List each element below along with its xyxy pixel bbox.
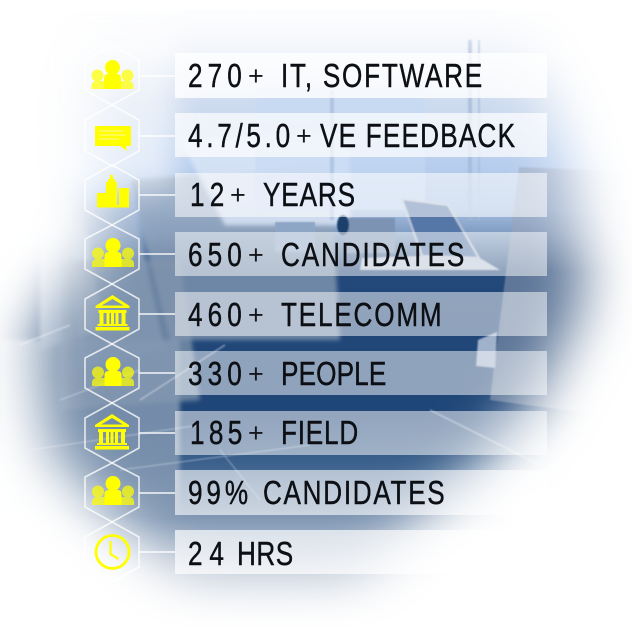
row 5: 460+ TELECOMM bbox=[175, 292, 547, 336]
row 7: 185+ FIELD: + bbox=[248, 418, 264, 448]
row 5: 460+ TELECOMM: 460 bbox=[188, 297, 242, 334]
row 3: 12+ YEARS: 12 bbox=[190, 177, 224, 214]
row 8: 99% CANDIDATES: CANDIDATES bbox=[263, 475, 445, 512]
row 5: 460+ TELECOMM: TELECOMM bbox=[281, 297, 442, 334]
row 8: 99% CANDIDATES bbox=[175, 470, 547, 515]
hexagon 6 bbox=[85, 344, 139, 403]
icon: buildings bbox=[97, 175, 129, 208]
row 2: 4.7/5.0 +VE FEEDBACK: VE FEEDBACK bbox=[320, 118, 515, 155]
pale haze behind the upper hexagons bbox=[40, 20, 175, 190]
row 1: 270+ IT, SOFTWARE: IT, SOFTWARE bbox=[281, 58, 482, 95]
row 2: 4.7/5.0 +VE FEEDBACK: + bbox=[296, 121, 312, 151]
row 9: 24 HRS: HRS bbox=[237, 536, 293, 573]
hexagon 5 bbox=[85, 284, 139, 344]
row 7: 185+ FIELD: 185 bbox=[190, 415, 242, 452]
hexagon 2 bbox=[85, 105, 139, 166]
row 4: 650+ CANDIDATES: 650 bbox=[188, 237, 242, 274]
row 2: 4.7/5.0 +VE FEEDBACK: 4.7/5.0 bbox=[188, 118, 290, 155]
row 1: 270+ IT, SOFTWARE: 270 bbox=[188, 58, 242, 95]
window columns bbox=[255, 40, 480, 253]
row 6: 330+ PEOPLE bbox=[175, 351, 547, 395]
icon: people bbox=[92, 238, 134, 267]
row 4: 650+ CANDIDATES: + bbox=[248, 240, 264, 270]
desk light streaks bbox=[20, 325, 540, 500]
hexagon 9 bbox=[85, 522, 139, 582]
row 2: 4.7/5.0 +VE FEEDBACK bbox=[175, 113, 547, 157]
icon: people bbox=[92, 60, 134, 89]
row 4: 650+ CANDIDATES: CANDIDATES bbox=[281, 237, 464, 274]
icon: bank bbox=[96, 295, 130, 330]
row 4: 650+ CANDIDATES bbox=[175, 232, 547, 276]
laptop and monitor bbox=[360, 166, 610, 408]
row 5: 460+ TELECOMM: + bbox=[248, 300, 264, 330]
row 6: 330+ PEOPLE: 330 bbox=[188, 356, 242, 393]
row 7: 185+ FIELD: FIELD bbox=[281, 415, 358, 452]
icon: people bbox=[92, 357, 134, 386]
icon: speech bubble bbox=[95, 126, 131, 151]
row 7: 185+ FIELD bbox=[175, 411, 547, 455]
hexagon 4 bbox=[85, 225, 139, 284]
row 3: 12+ YEARS bbox=[175, 173, 547, 217]
row 1: 270+ IT, SOFTWARE: + bbox=[248, 61, 264, 91]
hexagon 3 bbox=[85, 165, 139, 225]
hexagon column with connectors bbox=[85, 45, 175, 582]
row 3: 12+ YEARS: + bbox=[230, 180, 246, 210]
connector lines bbox=[139, 76, 175, 552]
icon: clock bbox=[96, 536, 129, 568]
row 8: 99% CANDIDATES: 99% bbox=[188, 475, 248, 512]
hexagon 7 bbox=[85, 403, 139, 463]
icon: bank bbox=[95, 414, 129, 450]
row 6: 330+ PEOPLE: PEOPLE bbox=[281, 356, 386, 393]
row 1: 270+ IT, SOFTWARE bbox=[175, 53, 547, 98]
icon: people bbox=[92, 476, 134, 505]
left dim chairs bbox=[6, 157, 352, 512]
row 9: 24 HRS: 24 bbox=[188, 536, 224, 573]
row 3: 12+ YEARS: YEARS bbox=[263, 177, 355, 214]
row 9: 24 HRS bbox=[175, 530, 547, 574]
row 6: 330+ PEOPLE: + bbox=[248, 359, 264, 389]
hexagon 1 bbox=[85, 45, 139, 105]
hexagon 8 bbox=[85, 463, 139, 522]
